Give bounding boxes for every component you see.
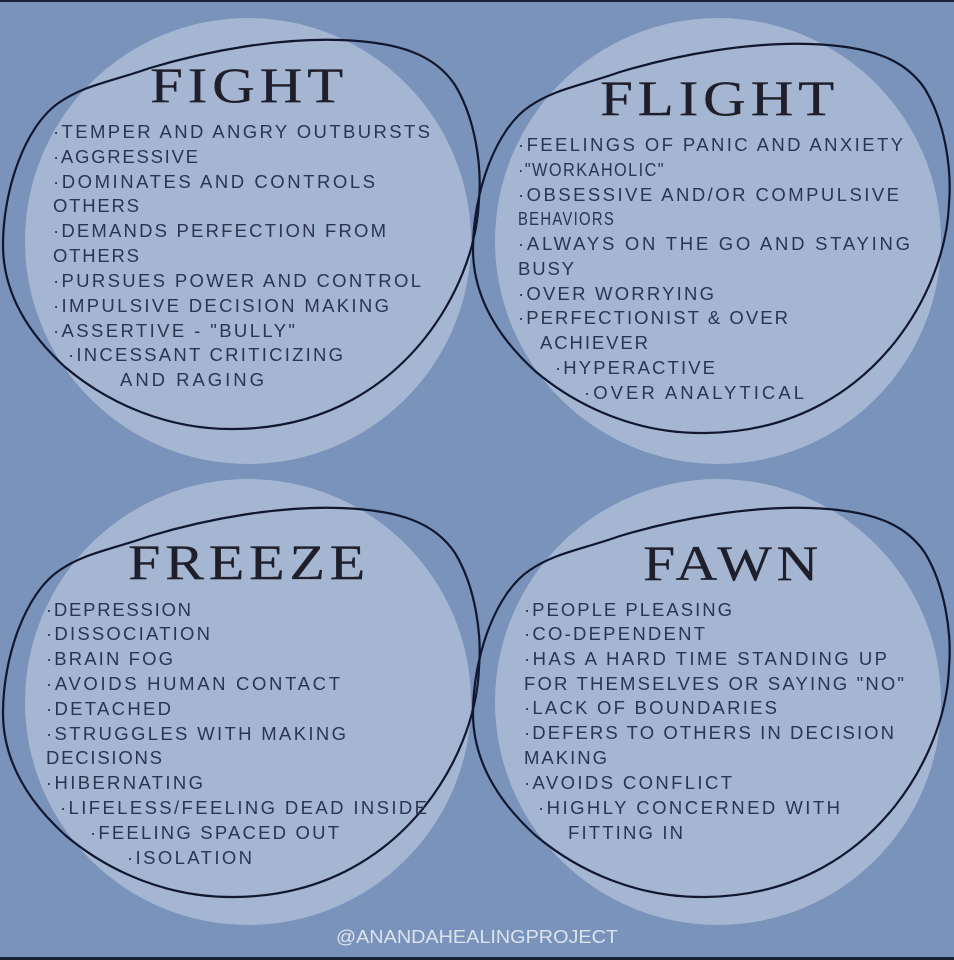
text block: freeze symptoms: ·AVOIDS HUMAN CONTACT (46, 673, 340, 694)
text block: flight symptoms: ·HYPERACTIVE (555, 357, 715, 378)
text block: fight symptoms: ·IMPULSIVE DECISION MAKING (53, 295, 389, 316)
heading: fight: FIGHT (150, 57, 348, 113)
text block: flight symptoms: ·OBSESSIVE AND/OR COMPULSIVE (518, 184, 899, 205)
text block: fawn symptoms: FITTING IN (568, 822, 683, 843)
text block: fawn symptoms: ·AVOIDS CONFLICT (524, 772, 732, 793)
circle: flight background (495, 18, 941, 464)
text block: fight symptoms: ·AGGRESSIVE (53, 146, 198, 167)
blob outline: fight (3, 40, 480, 429)
circle: fawn background (495, 479, 941, 925)
text block: fawn symptoms (524, 599, 904, 843)
text block: fight symptoms: OTHERS (53, 195, 139, 216)
text block: freeze symptoms: ·BRAIN FOG (46, 648, 173, 669)
circle: fight background (25, 18, 471, 464)
text block: fawn symptoms: ·HIGHLY CONCERNED WITH (538, 797, 840, 818)
circle: freeze background (25, 479, 471, 925)
text block: flight symptoms: ·"WORKAHOLIC" (518, 159, 665, 180)
text block: freeze symptoms: ·STRUGGLES WITH MAKING (46, 723, 346, 744)
text block: flight symptoms: ACHIEVER (540, 332, 648, 353)
text block: fawn symptoms: ·CO-DEPENDENT (524, 623, 705, 644)
blob outline: freeze (3, 508, 480, 897)
text block: freeze symptoms: ·HIBERNATING (46, 772, 203, 793)
text block: fight symptoms: ·DEMANDS PERFECTION FROM (53, 220, 386, 241)
text block: freeze symptoms: ·ISOLATION (127, 847, 252, 868)
text block: flight symptoms: BUSY (518, 258, 574, 279)
text block: freeze symptoms: ·LIFELESS/FEELING DEAD INSIDE (60, 797, 427, 818)
blob outline: flight (473, 44, 950, 433)
blob outline: fawn (473, 508, 950, 897)
panel: fight (3, 18, 480, 464)
text block: fight symptoms: ·TEMPER AND ANGRY OUTBURSTS (53, 121, 430, 142)
text block: flight symptoms: ·OVER ANALYTICAL (584, 382, 804, 403)
text block: flight symptoms: ·OVER WORRYING (518, 283, 714, 304)
text block: freeze symptoms: ·DISSOCIATION (46, 623, 210, 644)
watermark: handle: @ANANDAHEALINGPROJECT (336, 926, 618, 947)
text block: freeze symptoms: DECISIONS (46, 747, 162, 768)
text block: fawn symptoms: ·LACK OF BOUNDARIES (524, 697, 777, 718)
text block: fight symptoms: OTHERS (53, 245, 139, 266)
text block: fight symptoms: ·INCESSANT CRITICIZING (68, 344, 343, 365)
text block: flight symptoms: ·ALWAYS ON THE GO AND STAYING (518, 233, 910, 254)
text block: fight symptoms: AND RAGING (120, 369, 264, 390)
text block: fight symptoms: ·ASSERTIVE - "BULLY" (53, 320, 295, 341)
text block: fawn symptoms: ·PEOPLE PLEASING (524, 599, 732, 620)
text block: fight symptoms: ·DOMINATES AND CONTROLS (53, 171, 375, 192)
text block: freeze symptoms: ·DETACHED (46, 698, 171, 719)
text block: flight symptoms (518, 134, 910, 403)
text block: flight symptoms: ·PERFECTIONIST & OVER (518, 307, 788, 328)
text block: fight symptoms: ·PURSUES POWER AND CONTROL (53, 270, 421, 291)
panel: fawn (473, 479, 950, 925)
text block: fawn symptoms: MAKING (524, 747, 607, 768)
text block: freeze symptoms: ·DEPRESSION (46, 599, 191, 620)
text block: fight symptoms (53, 121, 430, 390)
panel: freeze (3, 479, 480, 925)
text block: fawn symptoms: ·HAS A HARD TIME STANDING UP (524, 648, 887, 669)
heading: fawn: FAWN (643, 535, 823, 591)
panel: flight (473, 18, 950, 464)
text block: flight symptoms: BEHAVIORS (518, 208, 615, 229)
text block: flight symptoms: ·FEELINGS OF PANIC AND ANXIETY (518, 134, 903, 155)
text block: fawn symptoms: ·DEFERS TO OTHERS IN DECISION (524, 722, 894, 743)
text block: fawn symptoms: FOR THEMSELVES OR SAYING "NO" (524, 673, 904, 694)
heading: freeze: FREEZE (128, 534, 370, 590)
text block: freeze symptoms (46, 599, 427, 868)
text block: freeze symptoms: ·FEELING SPACED OUT (90, 822, 339, 843)
heading: flight: FLIGHT (600, 70, 839, 126)
